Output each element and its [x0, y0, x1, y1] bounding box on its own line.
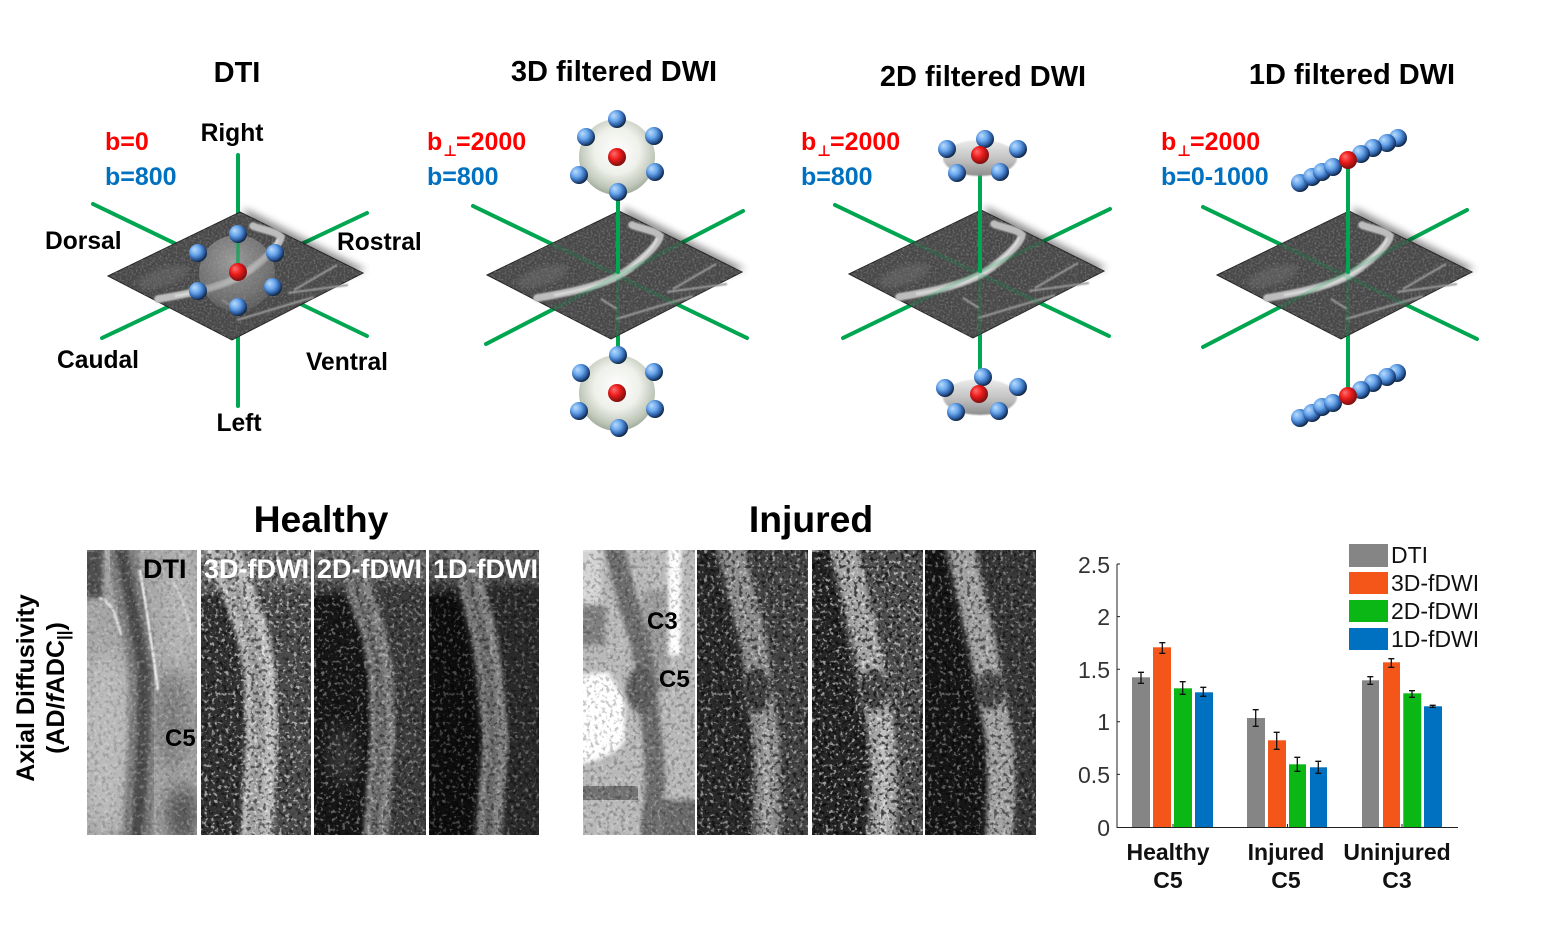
- image: Healthy 1D-fDWI: [424, 542, 539, 845]
- diffusion sampling sphere: [189, 225, 284, 316]
- x-axis labels: C3: [1382, 867, 1412, 893]
- image: Healthy DTI: DTI: [143, 554, 186, 584]
- bars: Uninjured C3: [1362, 662, 1442, 827]
- y-axis tick labels: [1078, 552, 1110, 841]
- y-axis tick labels: 2: [1097, 604, 1110, 630]
- image: Injured 2D-fDWI: [807, 542, 923, 845]
- direction labels: Rostral: [337, 229, 422, 256]
- image plane: [108, 208, 366, 340]
- y-axis label: Axial Diffusivity: Axial Diffusivity: [12, 594, 40, 782]
- b-value labels: b: [1161, 128, 1176, 156]
- axis lines through plane: [473, 192, 747, 344]
- lower sampling line: [1291, 364, 1406, 427]
- b-value labels: b=800: [105, 163, 177, 191]
- axis lines: [473, 192, 747, 355]
- image: Injured 1D-fDWI: [920, 542, 1036, 845]
- b-value labels: b=0: [105, 128, 149, 156]
- b-value labels: [801, 128, 900, 191]
- image: Healthy 2D-fDWI: 2D-fDWI: [317, 554, 422, 584]
- direction labels: Ventral: [306, 349, 388, 376]
- image plane: [487, 207, 745, 339]
- upper sampling line: [1291, 129, 1407, 192]
- panel: 2D filtered DWI schematic: [801, 61, 1110, 421]
- b-value labels: [105, 128, 177, 191]
- heading: Injured: Injured: [749, 498, 873, 540]
- title: 3D filtered DWI: 3D filtered DWI: [511, 56, 717, 88]
- panel: DTI schematic: [45, 57, 422, 437]
- y-axis tick labels: 0: [1097, 815, 1110, 841]
- y-axis label: Axial Diffusivity: ||: [54, 630, 73, 640]
- legend: 2D-fDWI: [1391, 598, 1479, 624]
- legend: 3D-fDWI: [1391, 570, 1479, 596]
- axis lines through plane: [1203, 160, 1477, 347]
- image: Healthy 3D-fDWI: 3D-fDWI: [204, 554, 309, 584]
- upper sampling disc: [938, 130, 1027, 182]
- y-axis label: Axial Diffusivity: (AD/fADC: [42, 640, 70, 754]
- image: Injured DTI: C3: [647, 608, 678, 635]
- panel: 3D filtered DWI schematic: [427, 56, 747, 437]
- axis lines: [93, 155, 367, 406]
- image: Healthy DTI: [79, 540, 198, 845]
- image plane: [849, 206, 1107, 338]
- y-axis tick labels: 1.5: [1078, 657, 1110, 683]
- legend: [1349, 542, 1479, 652]
- axes: [1117, 564, 1458, 828]
- bars: Healthy C5: [1132, 647, 1213, 827]
- direction labels: [45, 120, 422, 437]
- b-value labels: [427, 128, 526, 191]
- b-value labels: b=800: [427, 163, 499, 191]
- image plane: [1217, 207, 1475, 339]
- b-value labels: ⊥: [817, 143, 831, 160]
- image: Injured 3D-fDWI: [692, 542, 808, 845]
- x-axis labels: Uninjured: [1343, 839, 1451, 865]
- direction labels: Left: [216, 410, 262, 437]
- lower sampling disc: [936, 368, 1027, 421]
- b-value labels: b: [801, 128, 816, 156]
- direction labels: Right: [201, 120, 263, 147]
- b-value labels: =2000: [1190, 128, 1260, 156]
- upper sampling sphere: [570, 110, 664, 201]
- b-value labels: [1161, 128, 1269, 191]
- legend: DTI: [1391, 542, 1428, 568]
- lower sampling sphere: [570, 346, 664, 437]
- title: DTI: DTI: [214, 57, 260, 89]
- axis lines through plane: [835, 155, 1110, 338]
- axis lines: [835, 155, 1110, 395]
- x-axis labels: [1126, 839, 1451, 893]
- b-value labels: b: [427, 128, 442, 156]
- y-axis tick labels: 2.5: [1078, 552, 1110, 578]
- image: Injured DTI: C5: [659, 666, 690, 693]
- b-value labels: ⊥: [443, 143, 457, 160]
- x-axis labels: C5: [1153, 867, 1183, 893]
- y-axis label: Axial Diffusivity: ): [42, 622, 70, 630]
- x-axis labels: Healthy: [1126, 839, 1210, 865]
- image: Healthy 1D-fDWI: 1D-fDWI: [433, 554, 538, 584]
- title: 2D filtered DWI: 2D filtered DWI: [880, 61, 1086, 93]
- b-value labels: b=0-1000: [1161, 163, 1269, 191]
- error bars: [1138, 643, 1436, 773]
- b-value labels: =2000: [830, 128, 900, 156]
- bar chart: axial diffusivity: [1078, 542, 1479, 893]
- y-axis tick labels: 0.5: [1078, 762, 1110, 788]
- title: 1D filtered DWI: 1D filtered DWI: [1249, 59, 1455, 91]
- heading: Healthy: Healthy: [254, 498, 389, 540]
- y-axis label: Axial Diffusivity: [12, 594, 73, 782]
- b-value labels: =2000: [456, 128, 526, 156]
- bars: Injured C5: [1247, 718, 1327, 827]
- image: Injured DTI: [578, 542, 699, 845]
- y-axis tick labels: 1: [1097, 709, 1110, 735]
- image: Healthy DTI: C5: [165, 725, 196, 752]
- image: Healthy 2D-fDWI: [309, 542, 426, 845]
- legend: 1D-fDWI: [1391, 626, 1479, 652]
- direction labels: Dorsal: [45, 228, 122, 255]
- image: Healthy 3D-fDWI: [196, 542, 311, 845]
- x-axis labels: Injured: [1248, 839, 1324, 865]
- b-value labels: b=800: [801, 163, 873, 191]
- x-axis labels: C5: [1271, 867, 1301, 893]
- direction labels: Caudal: [57, 347, 139, 374]
- panel: 1D filtered DWI schematic: [1161, 59, 1477, 427]
- axis lines: [1203, 160, 1477, 396]
- b-value labels: ⊥: [1177, 143, 1191, 160]
